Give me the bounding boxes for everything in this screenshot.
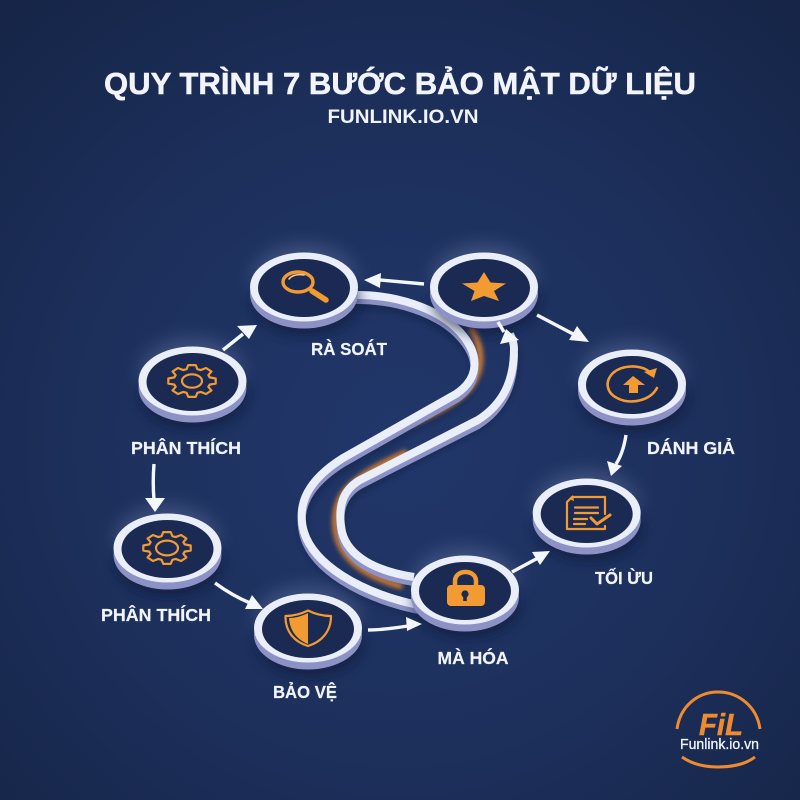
icon: star — [462, 272, 506, 301]
label: Phân thích 1: PHÂN THÍCH — [131, 437, 241, 458]
icon: padlock — [447, 572, 485, 606]
label: Mà hóa: MÀ HÓA — [438, 647, 509, 668]
step: Đánh giá — [578, 341, 688, 432]
arrow: Mà hóa to Tối ừu — [512, 551, 550, 572]
logo — [677, 692, 760, 767]
logo mark: FiL — [699, 707, 743, 742]
arrow: Phân thích to Bảo vệ — [215, 583, 263, 609]
title: QUY TRÌNH 7 BƯỚC BẢO MẬT DỮ LIỆU — [104, 65, 696, 101]
icon: magnifier — [283, 272, 326, 300]
inner curve — [340, 334, 514, 577]
step: Bảo vệ — [254, 585, 364, 676]
label: Rà soát: RÀ SOÁT — [311, 338, 387, 359]
label: Dánh giá: DÁNH GIẢ — [647, 437, 735, 458]
icon: gear — [143, 532, 191, 564]
orange glow on curves — [335, 330, 480, 586]
subtitle: FUNLINK.IO.VN — [328, 106, 478, 128]
step: Rà soát — [250, 244, 360, 335]
step: Mà hóa — [411, 547, 521, 638]
step: Tối ừu — [533, 470, 643, 561]
label: Bảo vệ: BẢO VỆ — [273, 681, 337, 702]
icon: refresh arrow up — [608, 366, 657, 401]
arrow: Phân thích to Rà soát — [223, 325, 257, 350]
logo name: Funlink.io.vn — [680, 737, 759, 753]
icon: shield — [285, 610, 331, 646]
step: Phân thích 2 — [114, 505, 223, 596]
icon: gear — [168, 365, 216, 397]
label: Tối ừu: TỐI ỪU — [595, 567, 653, 588]
outer curve — [302, 295, 475, 605]
curve depth — [302, 300, 514, 610]
icon: document with check — [567, 495, 610, 529]
arrow: inner curve into star — [498, 322, 519, 344]
arrow: Bảo vệ to Mà hóa — [368, 617, 422, 631]
step: Star — [430, 244, 540, 335]
S-shaped connector curves — [302, 295, 516, 613]
arrow: Đánh giá to Tối ừu — [607, 435, 626, 476]
arrow: star to Đánh giá — [537, 315, 589, 342]
logo arcs — [677, 692, 760, 729]
label: Phân thích 2: PHÂN THÍCH — [101, 604, 211, 625]
step: Phân thích 1 — [138, 338, 248, 429]
arrow: Phân thích to Phân thích — [145, 464, 165, 512]
arrow: star to Rà soát — [364, 273, 424, 288]
curve shadows — [304, 305, 516, 613]
